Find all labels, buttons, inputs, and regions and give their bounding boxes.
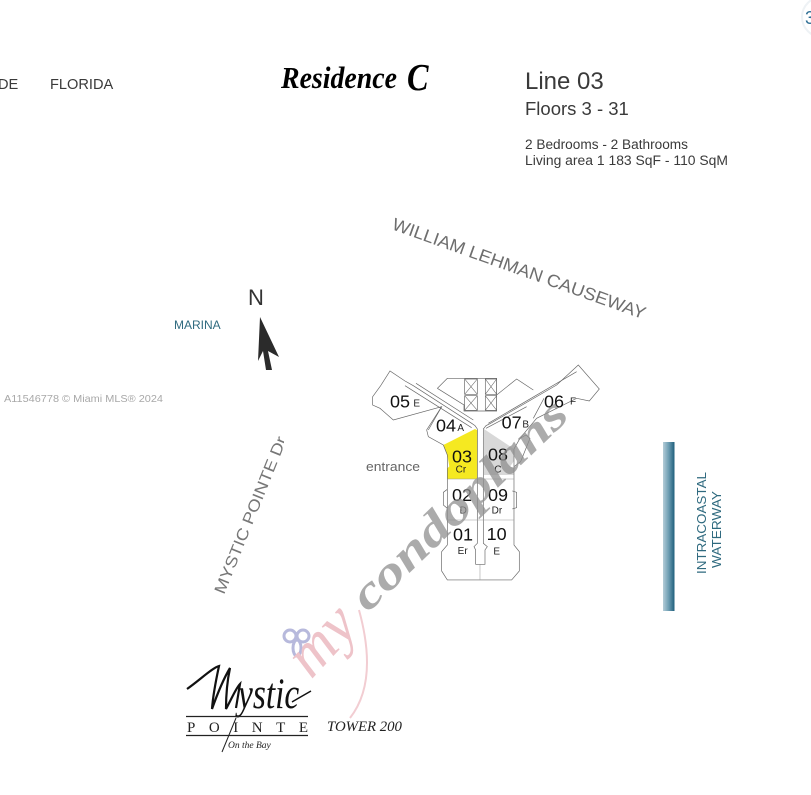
marina label: MARINA bbox=[174, 318, 221, 332]
unit numbers: 02 bbox=[452, 485, 472, 505]
unit details: Floors 3 - 31 bbox=[525, 98, 629, 119]
unit numbers: 08 bbox=[488, 444, 508, 464]
Mystic Pointe logo bbox=[186, 666, 311, 752]
unit numbers: 03 bbox=[452, 446, 472, 466]
watermark: my: my bbox=[272, 590, 371, 690]
unit numbers: 07 bbox=[502, 412, 522, 432]
watermark: condoplans: condoplans bbox=[340, 388, 578, 620]
header location text bbox=[0, 77, 114, 93]
intracoastal waterway band bbox=[663, 442, 674, 611]
road label: Mystic Pointe Dr: MYSTIC POINTE Dr bbox=[212, 434, 291, 596]
title: Residence C: Residence bbox=[280, 60, 397, 95]
north arrow: N bbox=[248, 285, 264, 310]
unit details: Line 03 bbox=[525, 68, 604, 95]
unit type letters bbox=[413, 396, 576, 557]
unit numbers: 04 bbox=[436, 416, 456, 436]
unit numbers: 09 bbox=[488, 485, 508, 505]
unit 08 highlight bbox=[484, 429, 514, 475]
unit type letters: F bbox=[570, 396, 576, 407]
corner badge bbox=[802, 0, 811, 37]
unit type letters: C bbox=[494, 464, 502, 475]
entrance label: entrance bbox=[366, 459, 420, 474]
unit numbers: 10 bbox=[487, 524, 507, 544]
road label: William Lehman Causeway: WILLIAM LEHMAN CAUSEWAY bbox=[390, 214, 649, 323]
waterway label: WATERWAY bbox=[710, 490, 724, 568]
unit type letters: Dr bbox=[492, 505, 503, 516]
unit 03 highlight bbox=[443, 429, 478, 479]
waterway label bbox=[695, 472, 724, 574]
title: Residence C: C bbox=[407, 57, 429, 99]
unit numbers: 05 bbox=[390, 391, 410, 411]
unit type letters: Cr bbox=[456, 464, 467, 475]
tower label: TOWER 200 bbox=[327, 719, 403, 735]
MLS watermark: A11546778 © Miami MLS® 2024 bbox=[4, 393, 163, 405]
watermark logo: trefoil bbox=[284, 630, 309, 656]
logo script wordmark: ystic bbox=[234, 670, 299, 717]
unit details bbox=[525, 68, 728, 168]
unit type letters: B bbox=[522, 420, 529, 431]
unit numbers: 06 bbox=[544, 391, 564, 411]
unit type letters: E bbox=[493, 546, 500, 557]
unit type letters: E bbox=[413, 399, 420, 410]
unit type letters: D bbox=[460, 505, 467, 516]
header location text: FLORIDA bbox=[50, 77, 114, 93]
building floor plan bbox=[373, 365, 599, 580]
unit numbers bbox=[390, 391, 564, 545]
unit type letters: Er bbox=[458, 546, 468, 557]
unit type letters: A bbox=[457, 423, 464, 434]
waterway label: INTRACOASTAL bbox=[695, 472, 709, 574]
logo tagline: On the Bay bbox=[228, 741, 272, 751]
unit details: Living area 1 183 SqF - 110 SqM bbox=[525, 153, 728, 168]
logo POINTE: POINTE bbox=[187, 720, 308, 736]
unit numbers: 01 bbox=[453, 525, 473, 545]
north arrow bbox=[248, 285, 279, 370]
building outline bbox=[373, 365, 599, 580]
unit details: 2 Bedrooms - 2 Bathrooms bbox=[525, 137, 688, 152]
